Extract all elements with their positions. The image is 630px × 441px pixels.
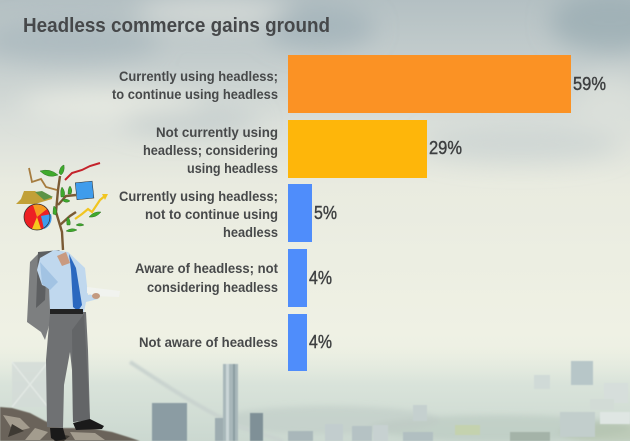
rocky ledge (0, 407, 140, 441)
trousers (46, 312, 90, 428)
bar row: currently using, not continuing, 5% (119, 184, 337, 242)
shoes (50, 428, 66, 441)
bar row: aware, not considering, 4%: considering headless (147, 279, 278, 295)
bar row: not using, considering, 29%: headless; considering (143, 142, 278, 158)
coins (16, 191, 52, 204)
bar row: currently using, not continuing, 5%: Currently using headless; (119, 188, 278, 204)
bar chart (112, 55, 606, 371)
businessman without a head (27, 250, 120, 441)
bar row: not using, considering, 29%: 29% (429, 138, 462, 158)
bar row: not aware, 4%: Not aware of headless (139, 334, 278, 350)
bar row: currently using, continuing, 59% (112, 55, 606, 113)
bar row: currently using, continuing, 59%: to continue using headless (112, 86, 278, 102)
bar row: aware, not considering, 4% (135, 249, 332, 307)
leaves (40, 165, 101, 232)
trunk and branches (56, 176, 76, 250)
tie (69, 254, 82, 311)
bar row: currently using, not continuing, 5%: headless (223, 224, 278, 240)
shirt (37, 250, 98, 312)
bar row: currently using, not continuing, 5%: not to continue using (145, 206, 278, 222)
brown arrow line (29, 168, 57, 190)
bar row: not using, considering, 29% (143, 120, 462, 178)
shopping bag (75, 181, 94, 200)
bar row: aware, not considering, 4%: 4% (309, 268, 332, 288)
bar row: not aware, 4% (139, 314, 332, 371)
hand at collar (57, 252, 70, 266)
pie chart (24, 204, 52, 230)
background: hazy city skyline (0, 345, 630, 441)
bar row: currently using, continuing, 59%: 59% (573, 74, 606, 94)
bar row: currently using, continuing, 59%: Currently using headless; (119, 68, 278, 84)
icon: growth doodle tree with charts (16, 163, 108, 250)
bar row: aware, not considering, 4%: Aware of headless; not (135, 260, 278, 276)
red trend line (65, 163, 100, 180)
jacket (27, 252, 50, 340)
title: Headless commerce gains ground (23, 15, 330, 37)
yellow rising arrow (75, 195, 106, 219)
bar row: not aware, 4%: 4% (309, 332, 332, 352)
bar row: currently using, not continuing, 5%: 5% (314, 203, 337, 223)
rolled plans (87, 287, 120, 297)
bar row: not using, considering, 29%: using headless (187, 160, 278, 176)
bar row: not using, considering, 29%: Not currently using (156, 124, 278, 140)
belt (50, 309, 83, 314)
